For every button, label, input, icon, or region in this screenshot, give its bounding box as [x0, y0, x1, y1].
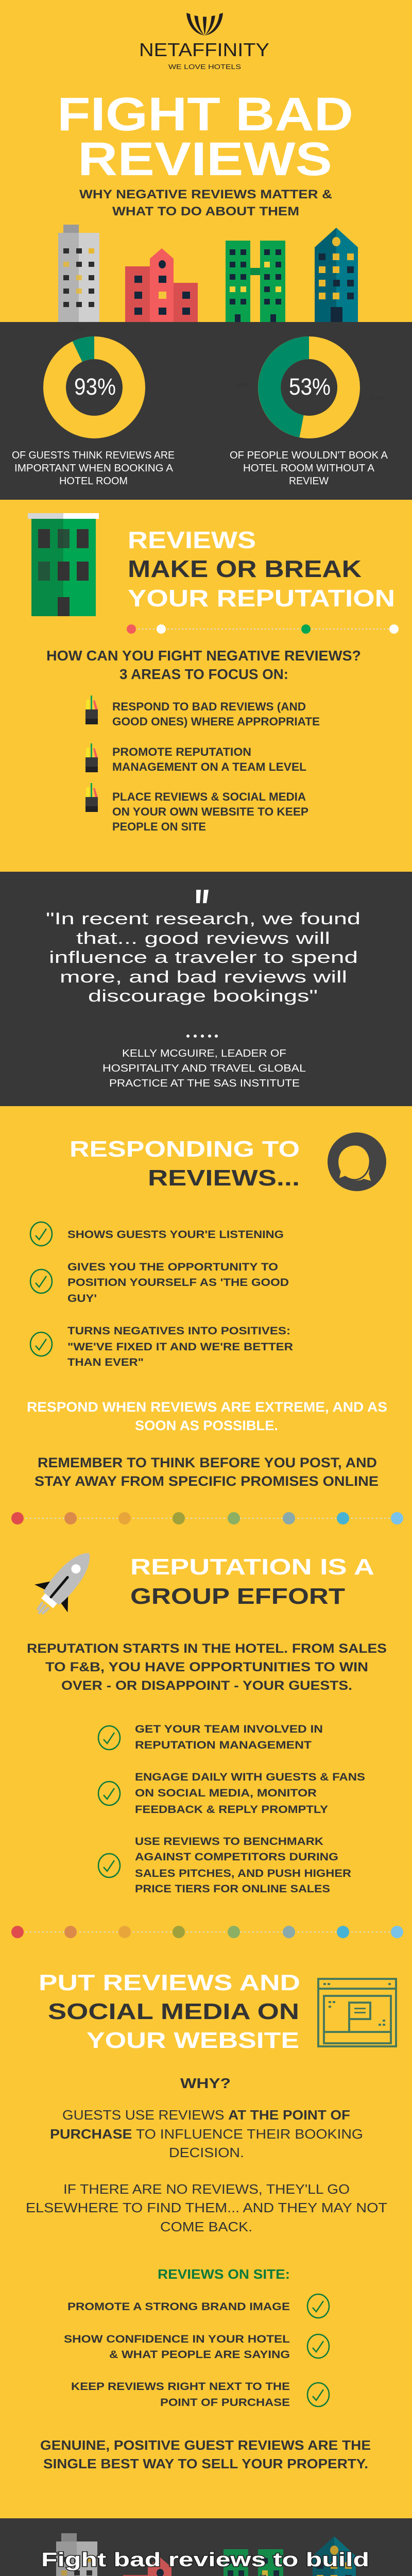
heading: reviews make or break: [128, 527, 395, 612]
text: no reviews: ELSEWHERE TO FIND THEM... AND THEY MAY NOT: [26, 2200, 387, 2215]
title: [57, 88, 353, 185]
tagline: WE LOVE HOTELS: [168, 63, 241, 71]
heading: reviews make or break: REVIEWS: [128, 527, 256, 553]
callout: genuine reviews: [40, 2437, 371, 2471]
text: no reviews: [26, 2181, 387, 2234]
text: reputation starts: [27, 1641, 387, 1693]
callout: think before you post: [35, 1455, 379, 1489]
quote text: discourage bookings": [88, 987, 318, 1005]
list: 3 areas: ON YOUR OWN WEBSITE TO KEEP: [112, 805, 308, 818]
list: group effort: REPUTATION MANAGEMENT: [135, 1739, 312, 1751]
list: group effort: AGAINST COMPETITORS DURING: [135, 1851, 338, 1863]
donut chart: 93%: [55, 325, 134, 427]
callout: respond when extreme: SOON AS POSSIBLE.: [135, 1418, 278, 1433]
panel: quote: [0, 872, 412, 1106]
illustration: city buildings: [58, 225, 358, 322]
attribution: KELLY MCGUIRE, LEADER OF: [122, 1048, 286, 1059]
donut chart: 53%: 53%: [289, 374, 331, 400]
text: point of purchase: PURCHASE TO INFLUENCE THEIR BOOKING: [50, 2126, 363, 2142]
header logo: [139, 13, 269, 71]
icon: check 2: [30, 1269, 52, 1293]
heading: reputation is a group effort: GROUP EFFORT: [130, 1584, 345, 1609]
list: 3 areas: PROMOTE REPUTATION: [112, 745, 251, 758]
heading: put reviews on website: [39, 1970, 300, 2053]
attribution: PRACTICE AT THE SAS INSTITUTE: [109, 1078, 300, 1089]
dot divider 3: [11, 1926, 403, 1938]
icon: pencils 2: [85, 743, 98, 772]
list: reviews on site: POINT OF PURCHASE: [160, 2397, 290, 2409]
callout: think before you post: REMEMBER TO THINK BEFORE YOU POST, AND: [38, 1455, 377, 1470]
text: reputation starts: TO F&B, YOU HAVE OPPORTUNITIES TO WIN: [45, 1660, 368, 1674]
text: reputation starts: REPUTATION STARTS IN THE HOTEL. FROM SALES: [27, 1641, 387, 1656]
title: REVIEWS: [78, 133, 332, 185]
heading: put reviews on website: YOUR WEBSITE: [87, 2028, 299, 2053]
list: reviews on site: SHOW CONFIDENCE IN YOUR HOTEL: [64, 2333, 290, 2345]
list: reviews on site: & WHAT PEOPLE ARE SAYING: [109, 2349, 290, 2361]
donut chart: 53%: 53%: [371, 395, 383, 402]
list: 3 areas: PLACE REVIEWS & SOCIAL MEDIA: [112, 790, 306, 803]
icon: check c: [98, 1854, 120, 1877]
list: responding benefits: SHOWS GUESTS YOUR'E LISTENING: [67, 1229, 284, 1241]
attribution: HOSPITALITY AND TRAVEL GLOBAL: [102, 1063, 306, 1074]
icon: pencils 1: [85, 696, 98, 724]
list: reviews on site: KEEP REVIEWS RIGHT NEXT TO THE: [71, 2381, 290, 2393]
heading: reviews make or break: YOUR REPUTATION: [128, 585, 395, 612]
subheading: reviews on site: REVIEWS ON SITE:: [158, 2266, 290, 2282]
text: how can you fight: 3 AREAS TO FOCUS ON:: [119, 666, 288, 682]
list: responding benefits: GIVES YOU THE OPPORTUNITY TO: [67, 1261, 278, 1273]
icon: check a: [98, 1726, 120, 1750]
list: group effort: ENGAGE DAILY WITH GUESTS & FANS: [135, 1771, 365, 1783]
dot divider 2: [11, 1512, 403, 1524]
heading: reviews make or break: MAKE OR BREAK: [128, 555, 362, 582]
icon: website: [318, 1979, 396, 2046]
heading: reputation is a group effort: REPUTATION IS A: [130, 1554, 374, 1580]
caption: 53%: HOTEL ROOM WITHOUT A: [243, 463, 375, 474]
callout: think before you post: STAY AWAY FROM SPECIFIC PROMISES ONLINE: [35, 1473, 379, 1489]
heading: reputation is a group effort: [130, 1554, 374, 1609]
banner text: Fight bad reviews to build: [41, 2549, 369, 2571]
icon: logo mark: [186, 13, 223, 36]
subtitle: WHAT TO DO ABOUT THEM: [112, 205, 299, 218]
callout: genuine reviews: GENUINE, POSITIVE GUEST REVIEWS ARE THE: [40, 2437, 371, 2453]
list: 3 areas: [85, 696, 320, 833]
text: how can you fight: HOW CAN YOU FIGHT NEGATIVE REVIEWS?: [46, 648, 361, 664]
donut chart: 93%: 7%: [75, 325, 84, 332]
list: 3 areas: MANAGEMENT ON A TEAM LEVEL: [112, 760, 306, 773]
heading: responding to reviews: RESPONDING TO: [70, 1137, 300, 1162]
attribution: [102, 1048, 306, 1089]
callout: respond when extreme: [27, 1399, 387, 1433]
heading: responding to reviews: REVIEWS...: [148, 1165, 300, 1191]
caption: 93%: [12, 450, 175, 487]
icon: check site 2: [307, 2334, 329, 2358]
subtitle: WHY NEGATIVE REVIEWS MATTER &: [79, 188, 332, 201]
heading: put reviews on website: PUT REVIEWS AND: [39, 1970, 300, 1995]
text: reputation starts: OVER - OR DISAPPOINT - YOUR GUESTS.: [61, 1679, 352, 1693]
text: point of purchase: [50, 2107, 363, 2160]
quote text: more, and bad reviews will: [60, 968, 347, 986]
donut chart: 53%: [236, 336, 383, 437]
icon: check 1: [30, 1222, 52, 1246]
text: point of purchase: GUESTS USE REVIEWS AT THE POINT OF: [62, 2107, 350, 2123]
dot divider: [127, 624, 399, 634]
heading: put reviews on website: SOCIAL MEDIA ON: [48, 1999, 299, 2024]
list: group effort: FEEDBACK & REPLY PROMPTLY: [135, 1804, 328, 1816]
heading: why: WHY?: [180, 2075, 231, 2091]
caption: 53%: [230, 450, 388, 487]
list: responding benefits: "WE'VE FIXED IT AND WE'RE BETTER: [67, 1341, 293, 1353]
icon: check site 1: [307, 2294, 329, 2318]
list: 3 areas: RESPOND TO BAD REVIEWS (AND: [112, 700, 306, 713]
heading: responding to reviews: [70, 1137, 300, 1191]
list: group effort: GET YOUR TEAM INVOLVED IN: [135, 1723, 323, 1735]
icon: quote mark: [196, 890, 209, 903]
list: group effort: USE REVIEWS TO BENCHMARK: [135, 1836, 323, 1848]
panel: statistics: [0, 322, 412, 500]
list: group effort: ON SOCIAL MEDIA, MONITOR: [135, 1787, 317, 1799]
caption: 93%: IMPORTANT WHEN BOOKING A: [14, 463, 174, 474]
list: responding benefits: THAN EVER": [67, 1357, 144, 1368]
panel: closing banner: [0, 2518, 412, 2576]
text: point of purchase: DECISION.: [169, 2145, 244, 2160]
list: reviews on site: PROMOTE A STRONG BRAND IMAGE: [67, 2301, 290, 2313]
brand name: NETAFFINITY: [139, 39, 269, 60]
caption: 53%: OF PEOPLE WOULDN'T BOOK A: [230, 450, 388, 461]
quote text: [46, 909, 360, 1005]
callout: respond when extreme: RESPOND WHEN REVIEWS ARE EXTREME, AND AS: [27, 1399, 387, 1415]
caption: 53%: REVIEW: [289, 476, 329, 487]
caption: 93%: HOTEL ROOM: [59, 476, 128, 487]
list: group effort: PRICE TIERS FOR ONLINE SALES: [135, 1883, 330, 1895]
icon: chat bubbles: [328, 1132, 386, 1191]
quote text: influence a traveler to spend: [49, 948, 358, 967]
list: responding benefits: [30, 1222, 293, 1368]
quote text: "In recent research, we found: [46, 909, 360, 928]
list: group effort: SALES PITCHES, AND PUSH HIGHER: [135, 1868, 351, 1879]
text: no reviews: COME BACK.: [160, 2219, 252, 2234]
list: responding benefits: POSITION YOURSELF AS 'THE GOOD: [67, 1277, 289, 1289]
subtitle: [79, 188, 332, 218]
icon: check 3: [30, 1332, 52, 1356]
icon: check site 3: [307, 2383, 329, 2406]
title: FIGHT BAD: [57, 88, 353, 141]
donut chart: 93%: 93%: [74, 374, 116, 400]
list: group effort: [98, 1723, 365, 1895]
icon: pencils 3: [85, 783, 98, 812]
illustration: buildings dark: [56, 2533, 356, 2576]
list: 3 areas: PEOPLE ON SITE: [112, 820, 206, 833]
callout: genuine reviews: SINGLE BEST WAY TO SELL YOUR PROPERTY.: [43, 2456, 368, 2471]
banner text: [41, 2549, 369, 2576]
donut chart: 53%: 47%: [236, 382, 249, 389]
icon: green building: [28, 513, 99, 616]
caption: 93%: OF GUESTS THINK REVIEWS ARE: [12, 450, 175, 461]
list: 3 areas: GOOD ONES) WHERE APPROPRIATE: [112, 715, 320, 728]
list: reviews on site: [64, 2294, 329, 2409]
list: responding benefits: GUY': [67, 1293, 97, 1304]
list: responding benefits: TURNS NEGATIVES INTO POSITIVES:: [67, 1325, 290, 1337]
icon: check b: [98, 1782, 120, 1805]
quote text: that... good reviews will: [76, 929, 330, 947]
icon: rocket: [23, 1539, 106, 1626]
text: no reviews: IF THERE ARE NO REVIEWS, THEY'LL GO: [63, 2181, 350, 2197]
text: how can you fight: [46, 648, 361, 682]
